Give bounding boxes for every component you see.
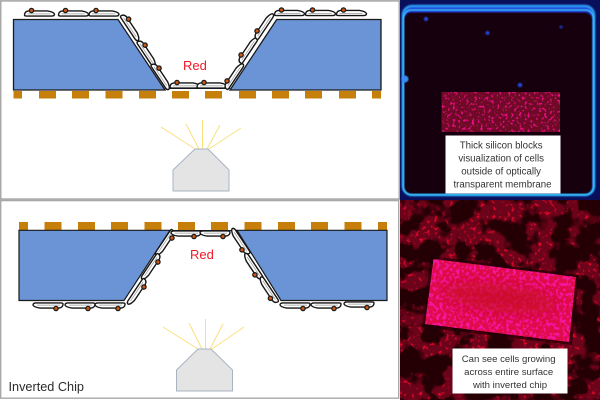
silicon block left [14,20,165,90]
caption: outside of optically [461,166,541,178]
dark surround of membrane window [422,256,579,345]
cells on standard chip [24,7,366,90]
caption: with inverted chip [472,380,547,391]
caption [452,348,568,394]
membrane pattern: brown strips [19,222,387,230]
caption: transparent membrane [453,180,552,190]
panel: micrograph of inverted chip [400,200,600,400]
caption: Thick silicon blocks [460,140,543,152]
silicon block left [19,230,170,300]
caption: Can see cells growing [462,354,556,365]
stray blue spots [402,17,563,87]
bright membrane window [425,259,576,342]
objective lens [173,149,229,191]
cells on inverted chip [33,228,374,311]
silicon block right [237,230,387,300]
blue chip edge glow [403,6,594,195]
objective lens [176,349,232,391]
cells across entire surface [400,200,600,400]
caption: visualization of cells [458,154,544,164]
panel: micrograph of standard chip [400,0,600,200]
label: Red: Red [190,247,214,262]
membrane line [170,230,237,232]
transparent membrane window with cells [442,92,560,132]
light rays [161,120,241,149]
panel: standard chip diagram [1,1,399,199]
panel: inverted chip diagram [1,201,399,398]
cyan inner edge line [404,10,594,194]
membrane line [165,88,230,90]
light rays [163,319,244,349]
membrane pattern: brown strips [14,91,381,98]
label: Inverted Chip: Inverted Chip [8,380,84,394]
caption: across entire surface [464,367,553,378]
caption [446,136,560,194]
dark chip interior [404,12,592,194]
silicon block right [230,20,381,90]
label: Red: Red [183,58,207,73]
